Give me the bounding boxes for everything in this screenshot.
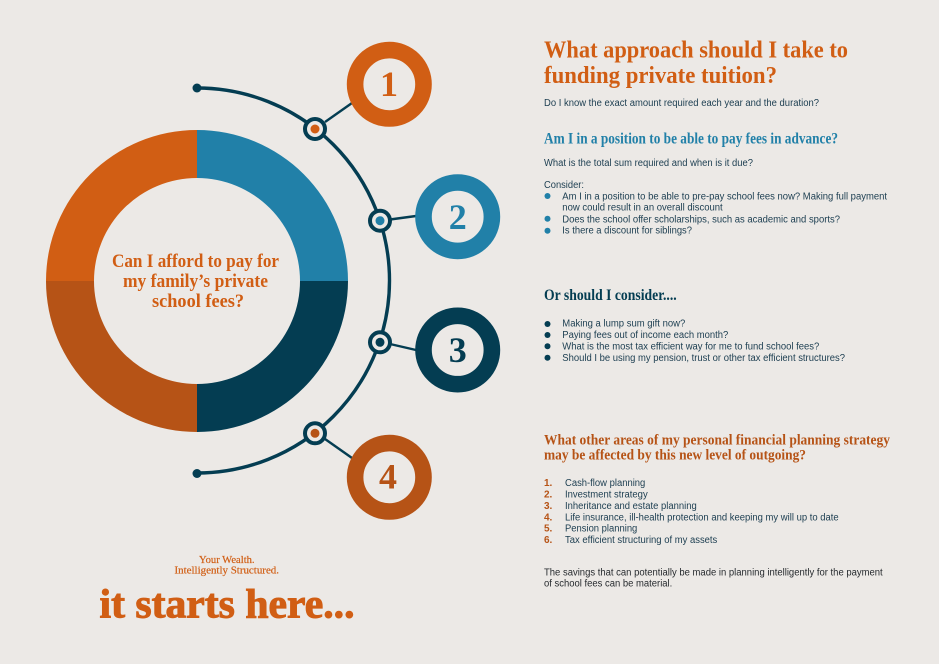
- donut centre question: school fees?: [152, 292, 244, 312]
- section 2 bullet list: now could result in an overall discount: [562, 203, 723, 214]
- brand strapline: [174, 555, 279, 576]
- donut centre question: my family’s private: [123, 272, 268, 292]
- section 3 heading: Or should I consider....: [544, 287, 677, 304]
- numbered list: 4.: [544, 512, 553, 523]
- numbered list: Tax efficient structuring of my assets: [565, 535, 717, 546]
- closing statement: The savings that can potentially be made in planning intelligently for the payment: [544, 568, 883, 578]
- donut chart: [46, 130, 348, 432]
- numbered list: 2.: [544, 489, 553, 500]
- section 3 bullet list: [544, 319, 845, 364]
- section 3 bullet list: Making a lump sum gift now?: [562, 319, 686, 330]
- curved connector arc: [192, 84, 389, 478]
- closing statement: of school fees can be material.: [544, 578, 672, 590]
- step 1 marker: 1: [380, 64, 398, 104]
- main heading: [544, 38, 848, 89]
- section 4 heading: [544, 432, 891, 464]
- section 2 text: [544, 158, 753, 191]
- donut centre question: Can I afford to pay for: [112, 252, 279, 272]
- section 3 bullet list: Should I be using my pension, trust or other tax efficient structures?: [562, 353, 845, 364]
- brand strapline: Intelligently Structured.: [174, 566, 279, 576]
- numbered list: Life insurance, ill-health protection and keeping my will up to date: [565, 512, 839, 523]
- numbered list: Cash-flow planning: [565, 478, 645, 489]
- brand slogan: it starts here...: [100, 580, 354, 626]
- closing statement: [544, 568, 883, 590]
- step 4 marker: [305, 423, 423, 511]
- section 2 bullet list: Is there a discount for siblings?: [562, 226, 692, 237]
- donut centre question: [112, 252, 279, 312]
- step 2 marker: 2: [449, 197, 467, 237]
- section 2 text: Consider:: [544, 180, 584, 191]
- section 2 text: What is the total sum required and when is it due?: [544, 158, 753, 169]
- brand strapline: Your Wealth.: [199, 555, 255, 566]
- step 2 marker: [370, 182, 492, 251]
- numbered list: 5.: [544, 523, 553, 534]
- section 4 heading: may be affected by this new level of outgoing?: [544, 448, 806, 464]
- numbered list: 6.: [544, 535, 553, 546]
- step 1 marker: [305, 50, 423, 139]
- step 3 marker: 3: [449, 330, 467, 370]
- main heading: funding private tuition?: [544, 63, 777, 89]
- section 2 bullet list: Does the school offer scholarships, such as academic and sports?: [562, 214, 840, 225]
- numbered list: [544, 478, 839, 546]
- numbered list: 3.: [544, 501, 553, 512]
- numbered list: 1.: [544, 478, 553, 489]
- numbered list: Inheritance and estate planning: [565, 501, 697, 512]
- step 3 marker: [370, 316, 492, 384]
- section 2 bullet list: [544, 192, 887, 237]
- numbered list: Investment strategy: [565, 489, 648, 500]
- section 4 heading: What other areas of my personal financial planning strategy: [544, 432, 891, 448]
- intro question: Do I know the exact amount required each year and the duration?: [544, 98, 819, 109]
- main heading: What approach should I take to: [544, 38, 848, 64]
- section 2 heading: Am I in a position to be able to pay fees in advance?: [544, 130, 838, 148]
- section 2 bullet list: Am I in a position to be able to pre-pay school fees now? Making full payment: [562, 192, 887, 202]
- section 3 bullet list: Paying fees out of income each month?: [562, 330, 729, 341]
- step 4 marker: 4: [379, 456, 397, 496]
- section 3 bullet list: What is the most tax efficient way for me to fund school fees?: [562, 342, 820, 353]
- numbered list: Pension planning: [565, 523, 637, 534]
